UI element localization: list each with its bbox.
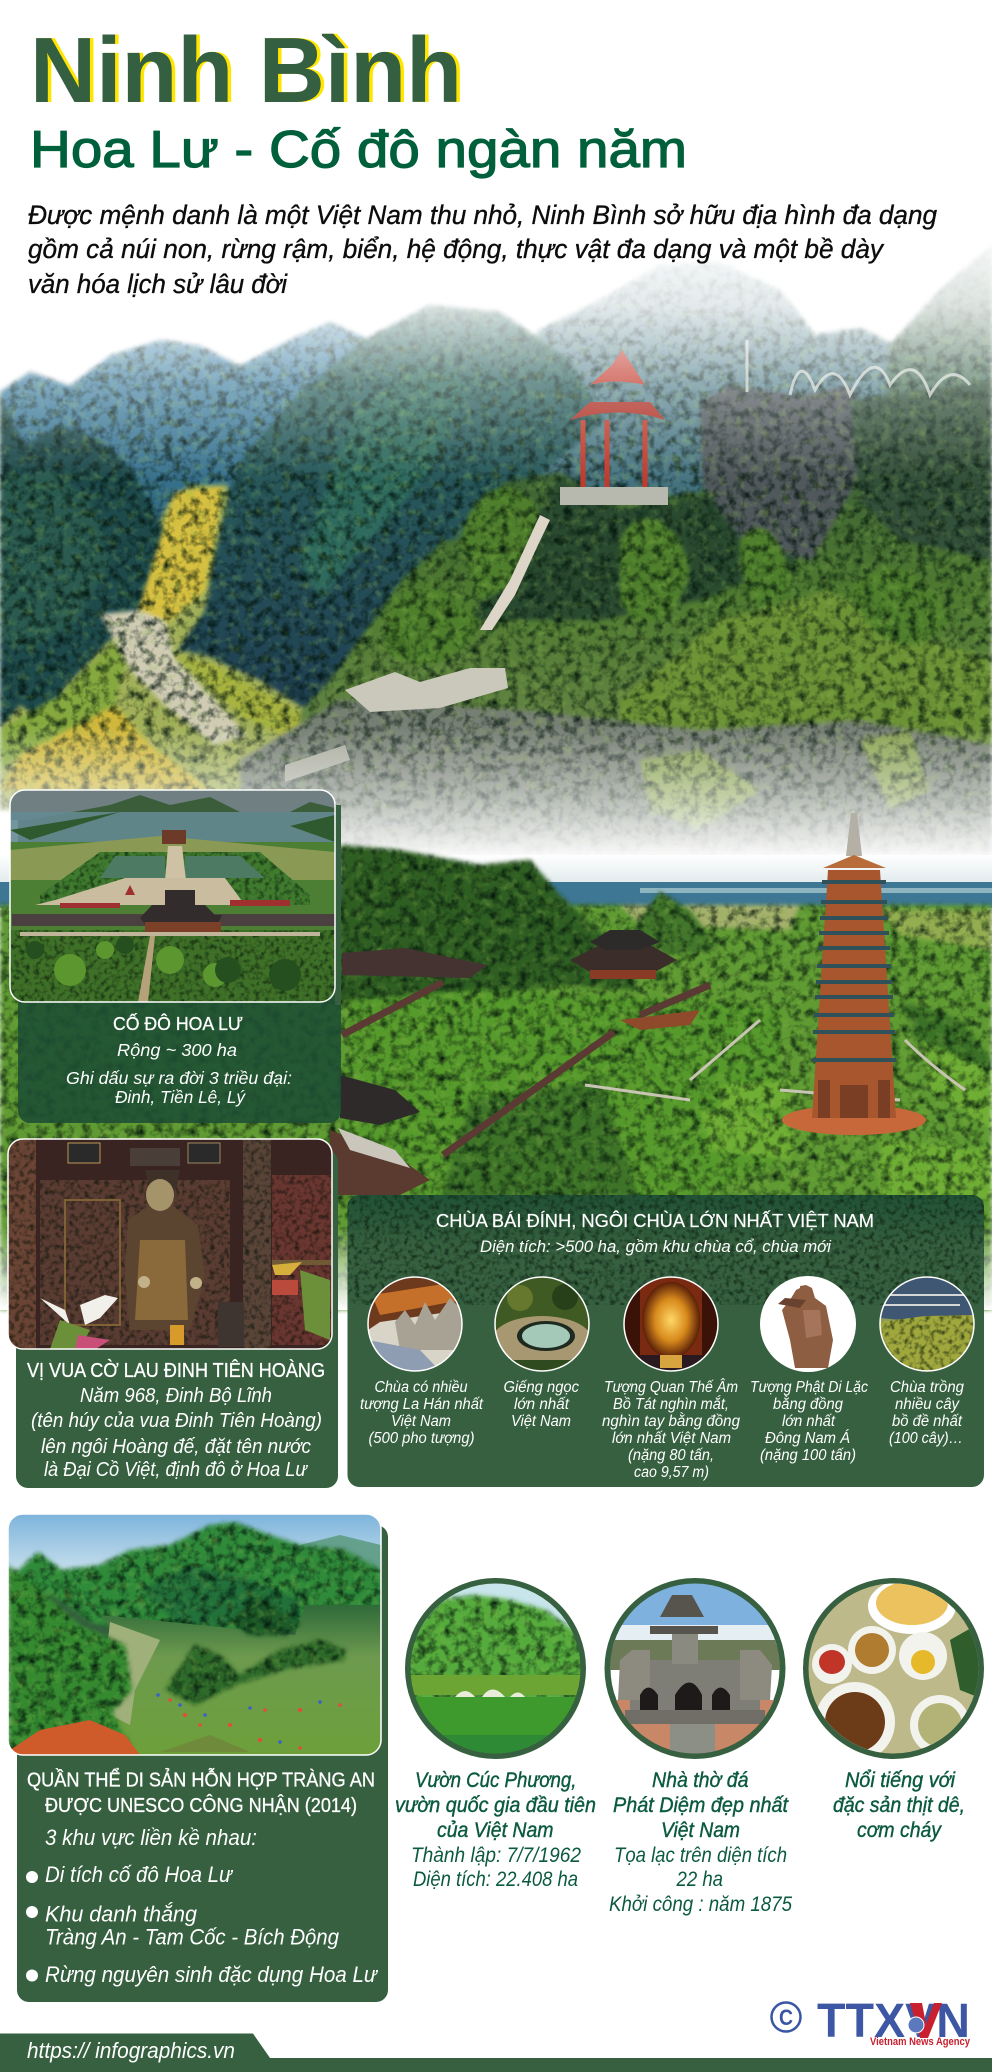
caption: Quan Thế Âm: Tượng Quan Thế Âm bbox=[604, 1379, 738, 1396]
caption: Quan Thế Âm: (nặng 80 tấn, bbox=[628, 1447, 714, 1464]
footer band bbox=[0, 2034, 992, 2072]
caption: Nhà thờ đá Phát Diệm: Nhà thờ đá bbox=[652, 1769, 749, 1792]
heading: QUẦN THỂ DI SẢN HỖN HỢP TRÀNG AN bbox=[27, 1768, 375, 1792]
heading bbox=[27, 1768, 375, 1817]
caption: đặc sản bbox=[833, 1769, 965, 1842]
panel: Cố đô Hoa Lư bbox=[10, 790, 341, 1123]
caption: La Hán bbox=[360, 1379, 484, 1447]
circle photo: Vườn Cúc Phương bbox=[405, 1578, 587, 1759]
caption: Di Lặc: Tượng Phật Di Lặc bbox=[750, 1379, 868, 1396]
caption: Vườn Cúc Phương: của Việt Nam bbox=[437, 1819, 554, 1842]
white walls and stairway bbox=[285, 515, 550, 782]
caption: đặc sản: Nổi tiếng với bbox=[845, 1769, 956, 1792]
heading: VỊ VUA CỜ LAU ĐINH TIÊN HOÀNG bbox=[27, 1359, 325, 1382]
logo: TTXVN: TTXVN bbox=[817, 1995, 970, 2048]
caption: Vườn Cúc Phương: Diện tích: 22.408 ha bbox=[413, 1868, 578, 1891]
intro paragraph: gồm cả núi non, rừng rậm, biển, hệ động, thực vật đa dạng và một bề dày bbox=[28, 234, 884, 264]
panel: chùa Bái Đính bbox=[348, 1195, 984, 1487]
caption: cây bồ đề: nhiều cây bbox=[895, 1396, 960, 1413]
caption: La Hán: Việt Nam bbox=[391, 1413, 451, 1430]
caption: Di Lặc bbox=[750, 1379, 868, 1464]
caption: cây bồ đề bbox=[889, 1379, 964, 1447]
subheading: Diện tích: >500 ha, gồm khu chùa cổ, chùa mới bbox=[480, 1237, 832, 1256]
caption: Giếng ngọc: lớn nhất bbox=[514, 1396, 570, 1413]
caption: Quan Thế Âm: cao 9,57 m) bbox=[634, 1464, 709, 1481]
description bbox=[31, 1385, 322, 1481]
bullet: Khu danh thắng: Tràng An - Tam Cốc - Bích Động bbox=[45, 1924, 340, 1950]
caption: Nhà thờ đá Phát Diệm: Việt Nam bbox=[661, 1819, 740, 1842]
footer url: https:// infographics.vn bbox=[27, 2038, 235, 2063]
caption: Vườn Cúc Phương: vườn quốc gia đầu tiên bbox=[395, 1794, 596, 1817]
caption: Giếng ngọc: Giếng ngọc bbox=[504, 1379, 579, 1396]
area and dynasties text: Đinh, Tiền Lê, Lý bbox=[115, 1087, 246, 1107]
background scene: Bái Đính pagoda grounds bbox=[0, 813, 992, 1310]
bullet: Khu danh thắng bbox=[26, 1902, 340, 1950]
caption: Di Lặc: Đông Nam Á bbox=[765, 1430, 850, 1447]
photo: giant well bbox=[492, 1277, 592, 1371]
caption: Nhà thờ đá Phát Diệm: Phát Diệm đẹp nhất bbox=[613, 1794, 789, 1817]
caption: Giếng ngọc bbox=[504, 1379, 579, 1430]
description: là Đại Cồ Việt, định đô ở Hoa Lư bbox=[44, 1459, 308, 1481]
intro paragraph: Được mệnh danh là một Việt Nam thu nhỏ, Ninh Bình sở hữu địa hình đa dạng bbox=[28, 200, 937, 230]
caption: Vườn Cúc Phương bbox=[395, 1769, 596, 1891]
intro paragraph bbox=[28, 200, 937, 299]
subtitle: Hoa Lư - Cố đô ngàn năm bbox=[30, 121, 687, 179]
panel: Quần thể Tràng An bbox=[8, 1514, 388, 2002]
tall pagoda bbox=[782, 813, 926, 1135]
caption: Di Lặc: lớn nhất bbox=[782, 1413, 836, 1430]
circle photo: đặc sản thịt dê, cơm cháy bbox=[803, 1578, 985, 1762]
logo: TTXVN: Vietnam News Agency bbox=[870, 2036, 971, 2048]
photo: Di Lặc bronze statue bbox=[760, 1276, 856, 1372]
caption: Di Lặc: bằng đồng bbox=[773, 1396, 843, 1413]
caption: Quan Thế Âm: Bồ Tát nghìn mắt, bbox=[613, 1396, 729, 1413]
photo: statue of the king bbox=[8, 1139, 332, 1349]
area and dynasties text bbox=[66, 1040, 292, 1107]
bullet: Di tích cố đô: Di tích cố đô Hoa Lư bbox=[45, 1862, 234, 1887]
statue bbox=[125, 1170, 205, 1330]
area and dynasties text: Rộng ~ 300 ha bbox=[117, 1040, 237, 1060]
description: lên ngôi Hoàng đế, đặt tên nước bbox=[41, 1436, 311, 1458]
intro line: 3 khu vực liền kề nhau: bbox=[45, 1825, 257, 1850]
bullet: Khu danh thắng: Khu danh thắng bbox=[45, 1902, 198, 1926]
photo: Tràng An landscape bbox=[8, 1514, 381, 1755]
caption: Quan Thế Âm: nghìn tay bằng đồng bbox=[602, 1413, 740, 1430]
temple buildings and corridors bbox=[330, 930, 965, 1195]
caption: Di Lặc: (nặng 100 tấn) bbox=[760, 1447, 856, 1464]
caption: Vườn Cúc Phương: Thành lập: 7/7/1962 bbox=[411, 1844, 581, 1867]
caption: La Hán: (500 pho tượng) bbox=[368, 1430, 474, 1447]
photo: bodhi trees bbox=[880, 1277, 974, 1371]
pavilion bbox=[560, 350, 668, 505]
title: Ninh Bình bbox=[34, 18, 466, 122]
photo: thousand-hand Quan Thế Âm statue bbox=[624, 1277, 718, 1371]
caption: Nhà thờ đá Phát Diệm: Khởi công : năm 1875 bbox=[609, 1893, 792, 1916]
lamp post and dragon balustrade bbox=[747, 340, 970, 395]
photo: La Hán statues hall bbox=[368, 1277, 462, 1371]
caption: Quan Thế Âm bbox=[602, 1379, 740, 1481]
caption: La Hán: Chùa có nhiều bbox=[374, 1379, 468, 1396]
caption: đặc sản: đặc sản thịt dê, bbox=[833, 1794, 965, 1817]
caption: Vườn Cúc Phương: Vườn Cúc Phương, bbox=[415, 1769, 576, 1792]
background scene: limestone mountains and pavilion bbox=[0, 225, 992, 870]
caption: Nhà thờ đá Phát Diệm bbox=[609, 1769, 792, 1916]
caption: cây bồ đề: bồ đề nhất bbox=[892, 1413, 963, 1430]
title: Ninh Bình bbox=[30, 18, 462, 122]
heading: CHÙA BÁI ĐÍNH, NGÔI CHÙA LỚN NHẤT VIỆT NAM bbox=[436, 1210, 874, 1231]
logo: TTXVN: C bbox=[779, 2005, 793, 2030]
panel: vua Đinh Tiên Hoàng bbox=[8, 1139, 338, 1488]
caption: cây bồ đề: Chùa trồng bbox=[890, 1379, 964, 1396]
description: (tên húy của vua Đinh Tiên Hoàng) bbox=[31, 1410, 322, 1432]
bullet: Rừng nguyên sinh: Rừng nguyên sinh đặc dụng Hoa Lư bbox=[45, 1962, 379, 1987]
intro paragraph: văn hóa lịch sử lâu đời bbox=[28, 269, 288, 299]
caption: Nhà thờ đá Phát Diệm: Tọa lạc trên diện tích bbox=[614, 1844, 787, 1867]
caption: Giếng ngọc: Việt Nam bbox=[511, 1413, 571, 1430]
caption: Quan Thế Âm: lớn nhất Việt Nam bbox=[612, 1430, 731, 1447]
caption: đặc sản: cơm cháy bbox=[857, 1819, 942, 1842]
heading: ĐƯỢC UNESCO CÔNG NHẬN (2014) bbox=[45, 1794, 357, 1817]
area and dynasties text: Ghi dấu sự ra đời 3 triều đại: bbox=[66, 1068, 292, 1088]
caption: cây bồ đề: (100 cây)… bbox=[889, 1430, 963, 1447]
heading: CỐ ĐÔ HOA LƯ bbox=[113, 1013, 243, 1034]
caption: La Hán: tượng La Hán nhất bbox=[360, 1396, 484, 1413]
circle photo: Nhà thờ đá Phát Diệm bbox=[604, 1578, 786, 1760]
photo: aerial view of Hoa Lư bbox=[10, 790, 335, 1002]
flowers and altar bbox=[40, 1260, 332, 1349]
description: Năm 968, Đinh Bộ Lĩnh bbox=[80, 1385, 272, 1407]
caption: Nhà thờ đá Phát Diệm: 22 ha bbox=[676, 1868, 723, 1891]
